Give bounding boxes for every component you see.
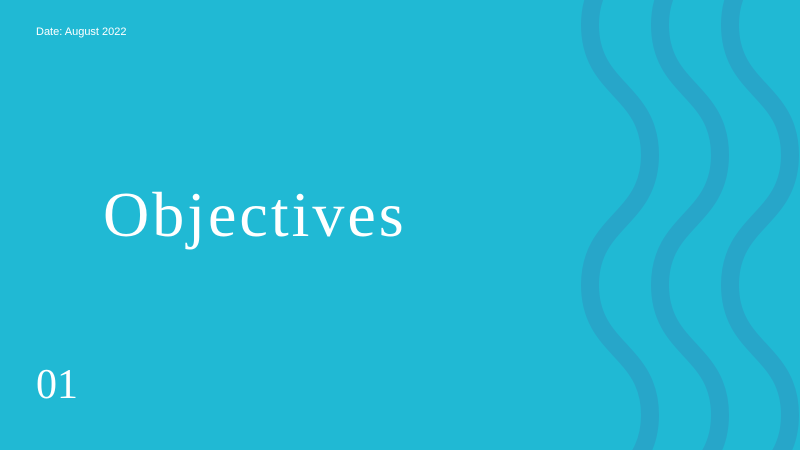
title: Objectives bbox=[103, 179, 407, 250]
section number: 01 bbox=[36, 362, 78, 408]
date: Date: August 2022 bbox=[36, 26, 127, 38]
